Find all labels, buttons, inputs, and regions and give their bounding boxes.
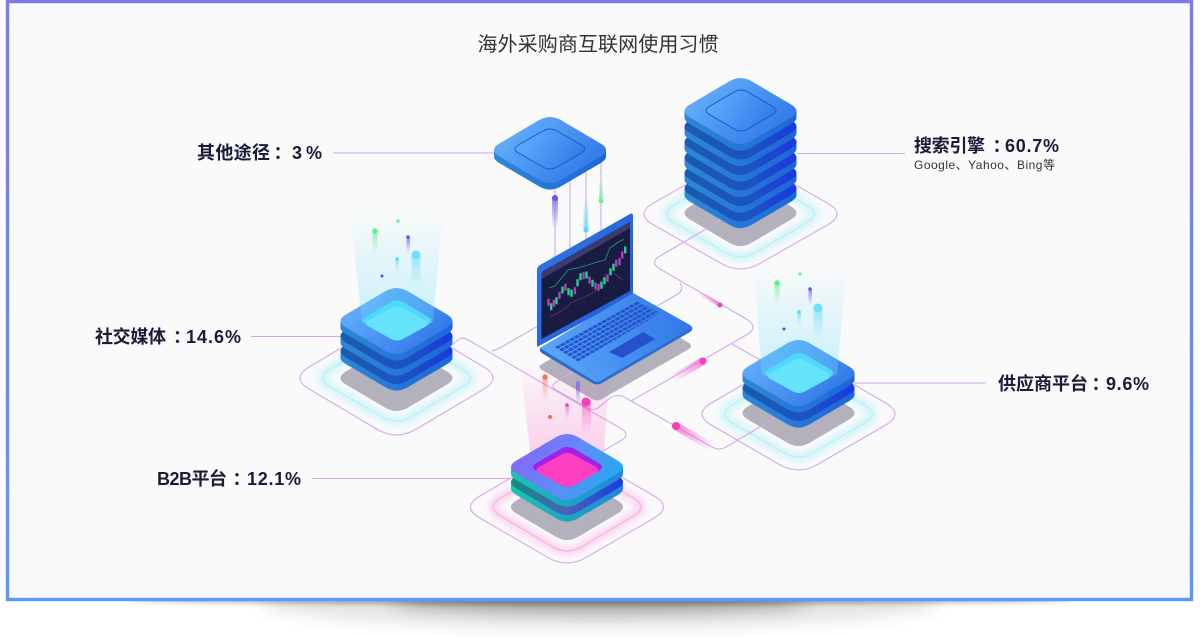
label: B2B platforms: ：	[232, 469, 250, 489]
label: social media: ：	[173, 327, 191, 347]
server stack: supplier platforms	[742, 340, 854, 428]
particles: social media	[372, 219, 420, 285]
platform outline: B2B platforms	[470, 451, 664, 563]
label: B2B platforms: 12.1%	[247, 469, 301, 489]
title: 海外采购商互联网使用习惯	[478, 33, 718, 56]
label: social media: 14.6%	[186, 327, 241, 347]
light beam: social media	[350, 210, 443, 341]
label: social media	[95, 326, 241, 347]
label: B2B platforms	[157, 468, 301, 489]
chip: other channels	[494, 117, 606, 190]
laptop	[537, 214, 692, 384]
particles: supplier platforms	[774, 272, 822, 338]
label: other channels	[197, 142, 322, 163]
label: supplier platforms	[998, 373, 1149, 394]
platform outline: search engines	[644, 159, 837, 269]
label: search engines: 60.7%	[1005, 136, 1059, 156]
laptop screen	[537, 214, 633, 347]
ground shadow	[133, 601, 1067, 632]
light beam: supplier platforms	[753, 265, 847, 393]
label: B2B platforms: B2B平台	[157, 468, 227, 489]
light beam: B2B platforms	[520, 362, 610, 487]
label: other channels: ：	[274, 143, 292, 163]
label: search engines: 搜索引擎	[914, 136, 985, 156]
server stack: search engines	[684, 78, 796, 228]
platform outline: supplier platforms	[702, 358, 895, 470]
label: search engines: ：	[992, 136, 1010, 156]
laptop base	[540, 293, 692, 384]
label: supplier platforms: 供应商平台	[998, 373, 1088, 394]
moving signal dots	[672, 292, 722, 448]
label: other channels: 3 %	[292, 143, 322, 163]
candlestick chart	[547, 239, 626, 317]
label: supplier platforms: 9.6%	[1106, 374, 1149, 394]
label: search engines: Google、Yahoo、Bing等	[914, 158, 1055, 172]
particles: B2B platforms	[542, 374, 591, 434]
label leader lines	[251, 153, 986, 478]
label: other channels: 其他途径	[197, 142, 270, 163]
label: social media: 社交媒体	[95, 326, 166, 347]
circuit lines	[452, 219, 775, 451]
connector lines: chip to laptop	[555, 160, 601, 262]
label: search engines	[914, 136, 1059, 172]
chip signal particles	[552, 178, 603, 233]
server stack: B2B platforms	[511, 434, 623, 522]
label: supplier platforms: ：	[1092, 374, 1110, 394]
platform outline: social media	[300, 321, 493, 435]
gray shadows	[340, 180, 854, 540]
server stack: social media	[340, 288, 452, 391]
